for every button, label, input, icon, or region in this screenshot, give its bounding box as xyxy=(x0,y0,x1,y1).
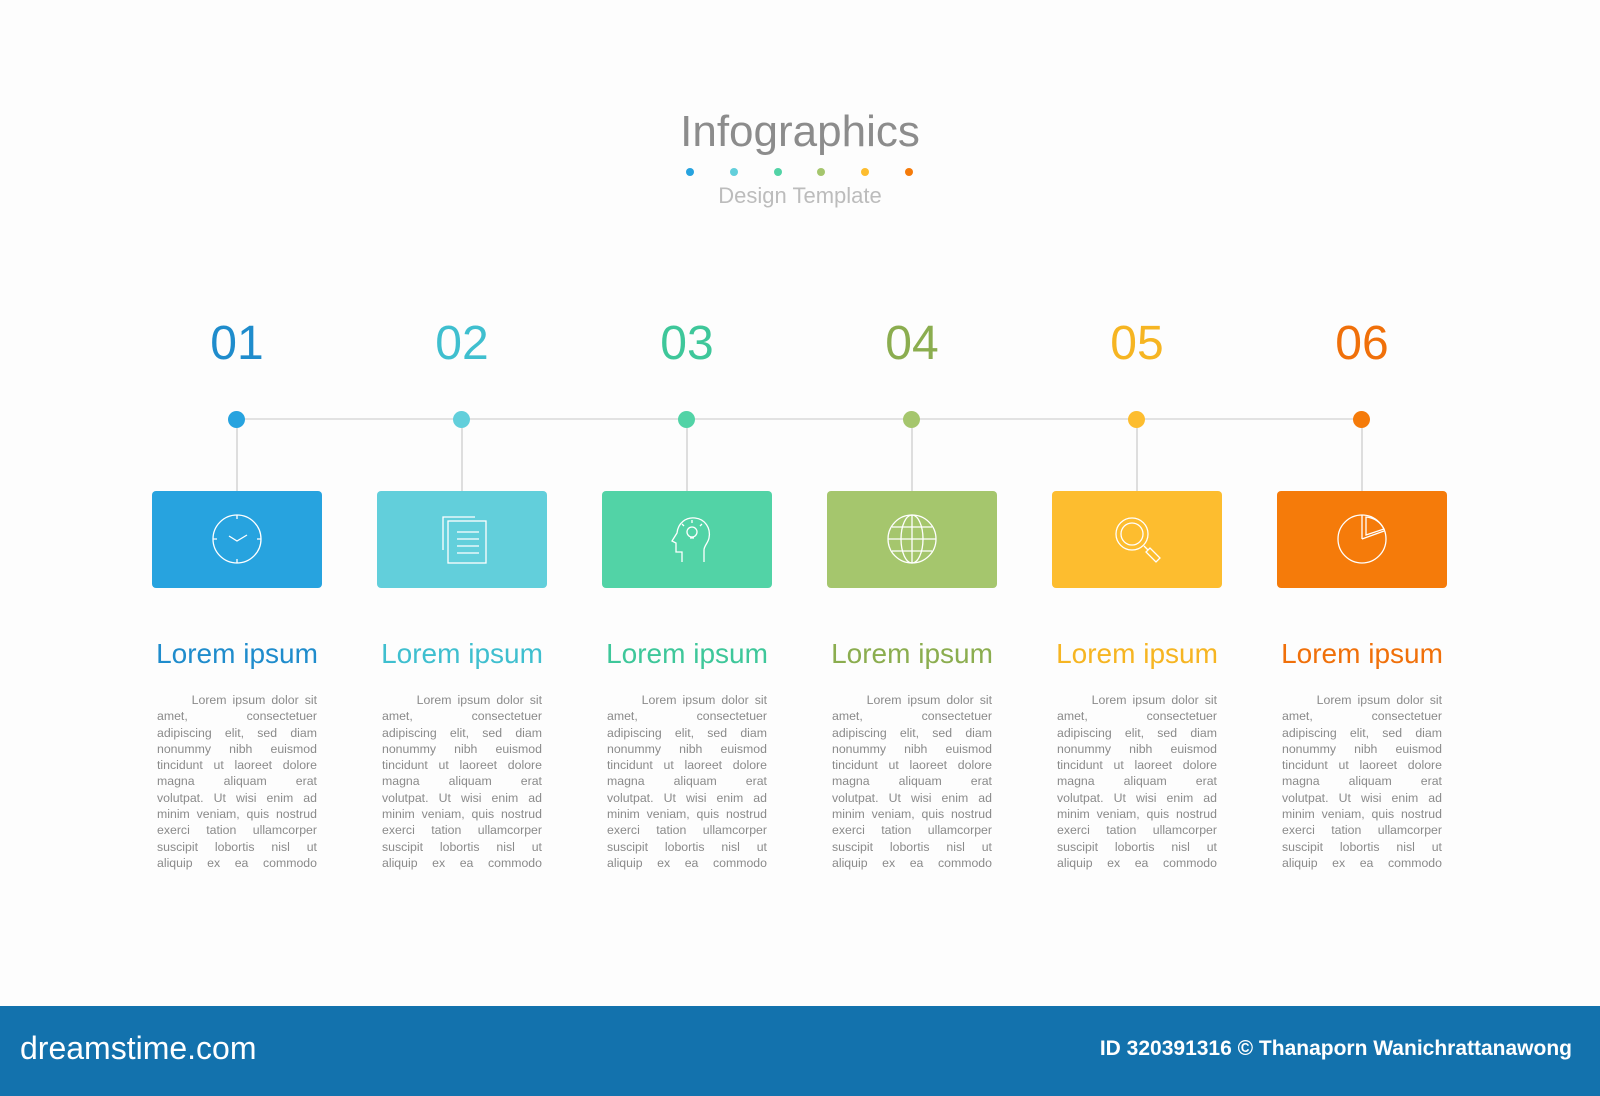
step 05: aliquip xyxy=(1057,856,1093,870)
step 05: laoreet xyxy=(1134,758,1172,772)
step 05: Lorem ipsum xyxy=(1056,638,1218,669)
step 02: tation xyxy=(431,823,461,837)
step 06: ullamcorper xyxy=(1378,823,1442,837)
timeline line xyxy=(237,418,1362,420)
step 02: diam xyxy=(515,726,542,740)
step 06: dolore xyxy=(1408,758,1442,772)
step 03: Lorem xyxy=(642,693,677,707)
step 02: sed xyxy=(482,726,502,740)
step 01: diam xyxy=(290,726,317,740)
step 02: Lorem xyxy=(417,693,452,707)
step 01: nostrud xyxy=(276,807,317,821)
step 06: tincidunt xyxy=(1282,758,1328,772)
step 02: minim xyxy=(382,807,415,821)
step 04: ex xyxy=(882,856,895,870)
step 01: magna xyxy=(157,774,195,788)
step 01: consectetuer xyxy=(247,709,317,723)
step 05: sit xyxy=(1205,693,1217,707)
step 06: amet, xyxy=(1282,709,1313,723)
step 01: ut xyxy=(307,840,317,854)
step 04: lobortis xyxy=(890,840,930,854)
step 02: suscipit xyxy=(382,840,423,854)
step 06: Lorem ipsum xyxy=(1281,638,1443,669)
step 06: lobortis xyxy=(1340,840,1380,854)
step 01: volutpat. xyxy=(157,791,204,805)
step 04: aliquam xyxy=(899,774,942,788)
step 01: exerci xyxy=(157,823,190,837)
step 02: lobortis xyxy=(440,840,480,854)
step 01: nibh xyxy=(229,742,252,756)
step 02: Lorem ipsum xyxy=(381,638,543,669)
step 02: ut xyxy=(532,840,542,854)
step 06: aliquam xyxy=(1349,774,1392,788)
step 02: tincidunt xyxy=(382,758,428,772)
step 03: dolor xyxy=(721,693,749,707)
step 01: nonummy xyxy=(157,742,211,756)
step 01: Lorem xyxy=(192,693,227,707)
step 06: quis xyxy=(1372,807,1394,821)
step 04: enim xyxy=(942,791,968,805)
step 01: amet, xyxy=(157,709,188,723)
step 06: enim xyxy=(1392,791,1418,805)
step 02: ea xyxy=(460,856,473,870)
step 04: amet, xyxy=(832,709,863,723)
step 03: nostrud xyxy=(726,807,767,821)
step 03: aliquam xyxy=(674,774,717,788)
step 06: wisi xyxy=(1361,791,1381,805)
step 02: nibh xyxy=(454,742,477,756)
step 03: amet, xyxy=(607,709,638,723)
step 04: minim xyxy=(832,807,865,821)
step 05: volutpat. xyxy=(1057,791,1104,805)
step 02: laoreet xyxy=(459,758,497,772)
step 03: ad xyxy=(753,791,767,805)
step 05: 05 xyxy=(1110,317,1164,370)
step 06: nibh xyxy=(1354,742,1377,756)
step 04: exerci xyxy=(832,823,865,837)
step 05: dolor xyxy=(1171,693,1199,707)
step 02: elit, xyxy=(450,726,469,740)
step 03: veniam, xyxy=(647,807,690,821)
step 05: dolore xyxy=(1183,758,1217,772)
step 03: elit, xyxy=(675,726,694,740)
step 03: quis xyxy=(697,807,719,821)
step 06: magna xyxy=(1282,774,1320,788)
step 04: ut xyxy=(889,758,899,772)
step 04: ea xyxy=(910,856,923,870)
step 05: Ut xyxy=(1114,791,1126,805)
step 05: nonummy xyxy=(1057,742,1111,756)
step 04: nibh xyxy=(904,742,927,756)
step 01: Lorem ipsum xyxy=(156,638,318,669)
step 03: nonummy xyxy=(607,742,661,756)
step 02: ullamcorper xyxy=(478,823,542,837)
step 03: sit xyxy=(755,693,767,707)
step 01: tation xyxy=(206,823,236,837)
step 03: ut xyxy=(757,840,767,854)
step 01: tincidunt xyxy=(157,758,203,772)
step 03: aliquip xyxy=(607,856,643,870)
subtitle: Design Template xyxy=(718,183,882,208)
step 04: adipiscing xyxy=(832,726,887,740)
step 06: elit, xyxy=(1350,726,1369,740)
step 06: minim xyxy=(1282,807,1315,821)
step 02: ex xyxy=(432,856,445,870)
step 05: wisi xyxy=(1136,791,1156,805)
step 06: volutpat. xyxy=(1282,791,1328,805)
step 06: ipsum xyxy=(1358,693,1390,707)
step 01: sit xyxy=(305,693,317,707)
step 06: consectetuer xyxy=(1372,709,1442,723)
step 05: Lorem xyxy=(1092,693,1127,707)
step 03: dolore xyxy=(733,758,767,772)
step 02: Ut xyxy=(439,791,451,805)
step 04: laoreet xyxy=(909,758,947,772)
step 02: nisl xyxy=(496,840,515,854)
step 01 xyxy=(152,317,322,870)
step 04: diam xyxy=(965,726,992,740)
footer credit: ID 320391316 © Thanaporn Wanichrattanawong xyxy=(1100,1037,1572,1060)
step 05: exerci xyxy=(1057,823,1090,837)
title: Infographics xyxy=(680,107,920,156)
step 03: ullamcorper xyxy=(703,823,767,837)
step 05: enim xyxy=(1167,791,1193,805)
step 06: dolor xyxy=(1396,693,1424,707)
step 06: ut xyxy=(1432,840,1442,854)
step 01: aliquam xyxy=(224,774,267,788)
step 04: veniam, xyxy=(872,807,915,821)
step 05: magna xyxy=(1057,774,1095,788)
step 04: nostrud xyxy=(951,807,992,821)
step 03: lobortis xyxy=(665,840,705,854)
step 06: nisl xyxy=(1396,840,1415,854)
step 03: volutpat. xyxy=(607,791,654,805)
step 03: Ut xyxy=(664,791,676,805)
step 06: ea xyxy=(1360,856,1373,870)
step 03: Lorem ipsum xyxy=(606,638,768,669)
step 03: nibh xyxy=(679,742,702,756)
step 04: dolor xyxy=(946,693,974,707)
step 04: sed xyxy=(932,726,952,740)
step 04: euismod xyxy=(946,742,992,756)
step 05: minim xyxy=(1057,807,1090,821)
step 06: exerci xyxy=(1282,823,1315,837)
step 02 xyxy=(377,317,547,870)
step 03: ex xyxy=(657,856,670,870)
step 01: ex xyxy=(207,856,220,870)
step 02: dolore xyxy=(508,758,542,772)
step 05: nostrud xyxy=(1176,807,1217,821)
step 02: sit xyxy=(530,693,542,707)
step 06: ex xyxy=(1332,856,1345,870)
step 04: tation xyxy=(881,823,911,837)
step 02: euismod xyxy=(496,742,542,756)
step 01: nisl xyxy=(271,840,290,854)
step 02: aliquip xyxy=(382,856,418,870)
step 04: elit, xyxy=(900,726,919,740)
step 03: enim xyxy=(717,791,743,805)
step 04: nonummy xyxy=(832,742,886,756)
step 02: enim xyxy=(492,791,518,805)
step 04: sit xyxy=(980,693,992,707)
step 05: lobortis xyxy=(1115,840,1155,854)
step 02: commodo xyxy=(488,856,542,870)
step 03: magna xyxy=(607,774,645,788)
step 04: erat xyxy=(971,774,992,788)
footer bar xyxy=(0,1006,1600,1096)
step 01: elit, xyxy=(225,726,244,740)
step 02: ipsum xyxy=(458,693,490,707)
step 04: volutpat. xyxy=(832,791,878,805)
step 01: enim xyxy=(267,791,293,805)
step 05: ex xyxy=(1107,856,1120,870)
step 03: suscipit xyxy=(607,840,648,854)
title dots xyxy=(686,168,913,176)
step 05: nibh xyxy=(1129,742,1152,756)
step 01: veniam, xyxy=(197,807,240,821)
step 05: amet, xyxy=(1057,709,1088,723)
step 06: nostrud xyxy=(1401,807,1442,821)
step 03: ea xyxy=(685,856,698,870)
step 02: 02 xyxy=(435,317,489,370)
step 04: dolore xyxy=(958,758,992,772)
step 03: tincidunt xyxy=(607,758,653,772)
step 03: ut xyxy=(664,758,674,772)
step 01: erat xyxy=(296,774,317,788)
step 06: tation xyxy=(1331,823,1361,837)
step 01: 01 xyxy=(210,317,264,370)
step 02: amet, xyxy=(382,709,413,723)
step 01: ut xyxy=(214,758,224,772)
step 05: aliquam xyxy=(1124,774,1167,788)
step 05: suscipit xyxy=(1057,840,1098,854)
step 06: commodo xyxy=(1388,856,1442,870)
step 04: ad xyxy=(978,791,992,805)
step 01: dolor xyxy=(271,693,299,707)
step 06: veniam, xyxy=(1322,807,1365,821)
step 05: tincidunt xyxy=(1057,758,1103,772)
step 01: dolore xyxy=(283,758,317,772)
step 03: ipsum xyxy=(683,693,715,707)
step 01: ipsum xyxy=(233,693,265,707)
step 05: elit, xyxy=(1125,726,1144,740)
step 03: nisl xyxy=(721,840,740,854)
step 05: diam xyxy=(1190,726,1217,740)
step 04 xyxy=(827,317,997,870)
step 03: laoreet xyxy=(684,758,722,772)
step 04: tincidunt xyxy=(832,758,878,772)
step 05: ipsum xyxy=(1133,693,1165,707)
step 06: laoreet xyxy=(1359,758,1397,772)
step 02: veniam, xyxy=(422,807,465,821)
step 04: quis xyxy=(922,807,944,821)
step 06: nonummy xyxy=(1282,742,1336,756)
step 03: wisi xyxy=(686,791,706,805)
step 03: sed xyxy=(707,726,727,740)
step 01: aliquip xyxy=(157,856,193,870)
step 02: ad xyxy=(528,791,542,805)
step 03: consectetuer xyxy=(697,709,767,723)
step 01: euismod xyxy=(270,742,317,756)
step 02: dolor xyxy=(496,693,524,707)
step 04: consectetuer xyxy=(922,709,992,723)
step 05: ea xyxy=(1135,856,1148,870)
step 01: sed xyxy=(257,726,277,740)
step 05: commodo xyxy=(1163,856,1217,870)
step 05: adipiscing xyxy=(1057,726,1112,740)
step 02: consectetuer xyxy=(472,709,542,723)
step 04: commodo xyxy=(938,856,992,870)
step 05: erat xyxy=(1196,774,1217,788)
step 01: Ut xyxy=(214,791,226,805)
step 02: ut xyxy=(439,758,449,772)
step 02: aliquam xyxy=(449,774,492,788)
step 03: euismod xyxy=(720,742,767,756)
step 03: diam xyxy=(740,726,767,740)
step 06: aliquip xyxy=(1282,856,1318,870)
step 05: veniam, xyxy=(1097,807,1140,821)
step 05: ullamcorper xyxy=(1153,823,1217,837)
step 05 xyxy=(1052,317,1222,870)
step 03: minim xyxy=(607,807,640,821)
step 04: Lorem ipsum xyxy=(831,638,993,669)
step 05: quis xyxy=(1147,807,1169,821)
step 05: tation xyxy=(1106,823,1136,837)
step 05: ad xyxy=(1203,791,1217,805)
step 02: magna xyxy=(382,774,420,788)
step 03: erat xyxy=(746,774,767,788)
step 06: Lorem xyxy=(1317,693,1352,707)
step 06: suscipit xyxy=(1282,840,1323,854)
step 04: 04 xyxy=(885,317,939,370)
step 04: nisl xyxy=(946,840,965,854)
step 06: erat xyxy=(1421,774,1442,788)
step 03: exerci xyxy=(607,823,640,837)
step 04: ut xyxy=(982,840,992,854)
step 03: 03 xyxy=(660,317,714,370)
step 02: nonummy xyxy=(382,742,436,756)
step 03: adipiscing xyxy=(607,726,662,740)
step 06: sed xyxy=(1382,726,1402,740)
step 01: commodo xyxy=(263,856,317,870)
step 06 xyxy=(1277,317,1447,870)
step 01: quis xyxy=(247,807,269,821)
step 06: diam xyxy=(1415,726,1442,740)
step 04: ullamcorper xyxy=(928,823,992,837)
step 01: ad xyxy=(303,791,317,805)
step 06: adipiscing xyxy=(1282,726,1337,740)
step 01: ea xyxy=(235,856,248,870)
step 01: ullamcorper xyxy=(253,823,317,837)
step 04: suscipit xyxy=(832,840,873,854)
step 05: nisl xyxy=(1171,840,1190,854)
step 04: Ut xyxy=(889,791,901,805)
step 01: laoreet xyxy=(234,758,272,772)
step 02: quis xyxy=(472,807,494,821)
step 02: erat xyxy=(521,774,542,788)
step 01: lobortis xyxy=(215,840,255,854)
footer logo: dreamstime.com xyxy=(20,1030,256,1066)
step 05: euismod xyxy=(1170,742,1217,756)
step 04: magna xyxy=(832,774,870,788)
step 04: wisi xyxy=(911,791,931,805)
step 06: ut xyxy=(1339,758,1349,772)
step 04: ipsum xyxy=(908,693,940,707)
step 06: sit xyxy=(1430,693,1442,707)
step 05: ut xyxy=(1114,758,1124,772)
step 05: ut xyxy=(1207,840,1217,854)
step 03 xyxy=(602,317,772,870)
step 05: consectetuer xyxy=(1147,709,1217,723)
step 01: adipiscing xyxy=(157,726,212,740)
step 04: aliquip xyxy=(832,856,868,870)
step 06: ad xyxy=(1428,791,1442,805)
step 05: sed xyxy=(1157,726,1177,740)
step 06: 06 xyxy=(1335,317,1389,370)
step 03: tation xyxy=(656,823,686,837)
step 03: commodo xyxy=(713,856,767,870)
step 06: Ut xyxy=(1339,791,1351,805)
step 01: suscipit xyxy=(157,840,198,854)
step 02: adipiscing xyxy=(382,726,437,740)
step 02: volutpat. xyxy=(382,791,428,805)
step 02: wisi xyxy=(461,791,481,805)
step 04: Lorem xyxy=(867,693,902,707)
step 01: minim xyxy=(157,807,190,821)
step 06: euismod xyxy=(1396,742,1442,756)
step 02: exerci xyxy=(382,823,415,837)
step 01: wisi xyxy=(236,791,256,805)
step 02: nostrud xyxy=(501,807,542,821)
